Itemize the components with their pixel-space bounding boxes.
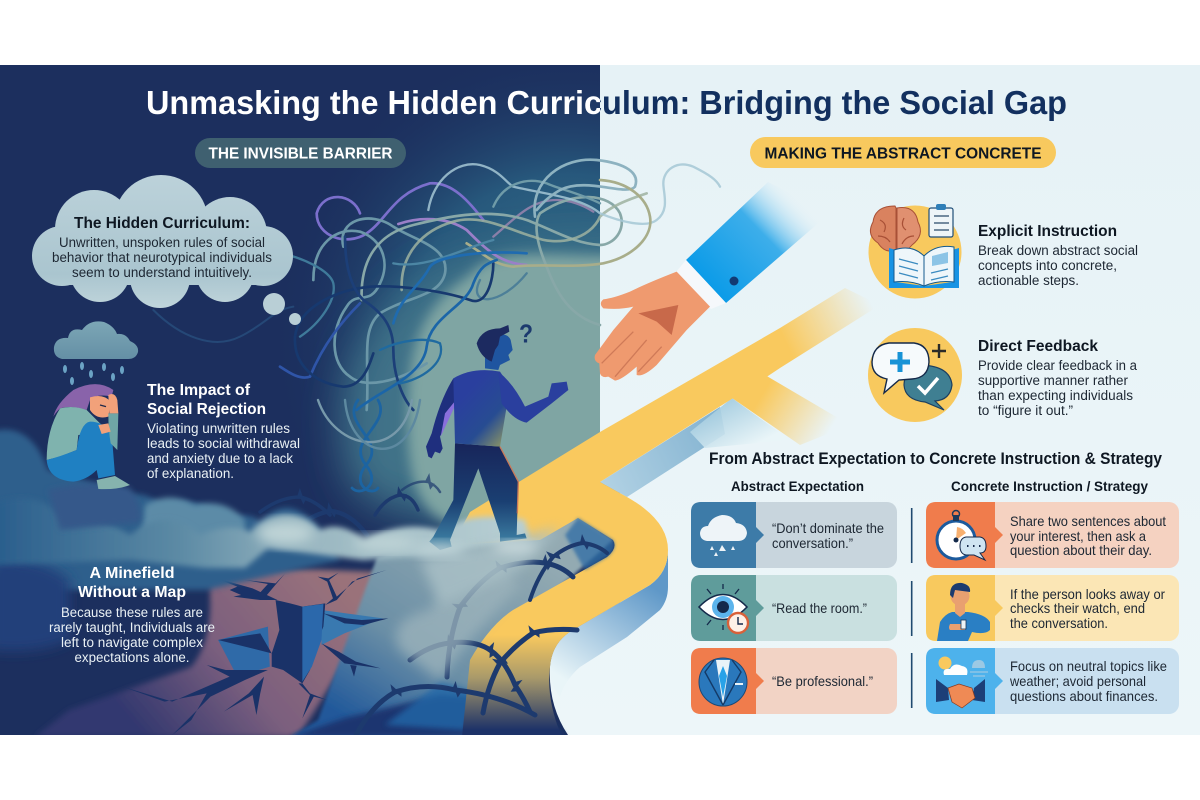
section: minefield without a map: rarely taught, Individuals are (49, 620, 215, 635)
icon: person checking watch (937, 583, 990, 641)
right arm (498, 372, 568, 423)
rock under seated figure (48, 483, 140, 530)
section: minefield without a map: left to navigate complex (61, 635, 203, 650)
question mark: ? (519, 319, 533, 349)
icon: weather and handshake (936, 656, 988, 708)
direct feedback text: Provide clear feedback in a (978, 358, 1137, 373)
card: read the room: “Read the room.” (772, 600, 867, 616)
icon: storm cloud (700, 515, 747, 556)
sleeve button (730, 276, 738, 286)
cloud heading: The Hidden Curriculum: (74, 215, 250, 232)
explicit instruction text: Break down abstract social (978, 243, 1138, 258)
card: neutral topics: questions about finances. (1010, 688, 1158, 704)
card: neutral topics: Focus on neutral topics like (1010, 658, 1167, 674)
icon: feedback speech bubbles (868, 328, 962, 422)
title: Unmasking the Hidden Curriculum: Bridging the Social Gap (146, 84, 1067, 121)
finger lines (602, 332, 662, 377)
blue wedge under branch (690, 398, 773, 448)
lower braid of strands (318, 400, 420, 491)
orange rim on legs (500, 447, 518, 513)
comparison table heading: From Abstract Expectation to Concrete Instruction & Strategy (709, 450, 1163, 468)
card: share two sentences: your interest, then ask a (1010, 528, 1146, 544)
column heading: abstract expectation: Abstract Expectation (731, 478, 864, 494)
card: looks away: the conversation. (1010, 615, 1108, 631)
left arm (426, 378, 454, 458)
legs (429, 443, 527, 550)
card: be professional (691, 648, 897, 714)
pill: making the abstract concrete (750, 137, 1056, 168)
section: impact of social rejection (147, 382, 300, 481)
blue sleeve (686, 183, 812, 303)
person walking through fog (426, 319, 568, 550)
section: minefield without a map: Because these rules are (61, 605, 203, 620)
torso (453, 370, 510, 447)
card: neutral topics: weather; avoid personal (1009, 673, 1146, 689)
card: share two sentences: question about their day. (1010, 542, 1152, 558)
explicit instruction text (978, 223, 1138, 288)
seated sad figure (47, 384, 130, 489)
section: minefield without a map: A Minefield (90, 565, 174, 582)
pill: making the abstract concrete: MAKING THE ABSTRACT CONCRETE (764, 146, 1042, 162)
section: minefield without a map (49, 565, 215, 665)
icon: rain cloud (54, 321, 138, 385)
column dividers (911, 508, 913, 708)
section: minefield without a map: Without a Map (78, 584, 186, 601)
column heading: concrete instruction: Concrete Instruction / Strategy (951, 478, 1148, 494)
thorny vines (260, 482, 607, 735)
card: neutral topics (926, 648, 1179, 714)
crack in the ground (122, 570, 388, 735)
direct feedback text: Direct Feedback (978, 338, 1098, 355)
section: impact of social rejection: Social Rejection (147, 401, 266, 418)
fog over feet (414, 542, 537, 557)
card: don't dominate: conversation.” (772, 535, 853, 551)
thought bubbles (263, 293, 301, 325)
card: share two sentences (926, 502, 1179, 568)
road outer side wall (550, 552, 668, 678)
section: minefield without a map: expectations alone. (74, 650, 190, 665)
section: impact of social rejection: of explanation. (147, 466, 234, 481)
explicit instruction text: concepts into concrete, (978, 258, 1117, 273)
neck and head (485, 335, 513, 370)
grey diagonal slab (290, 518, 613, 737)
direct feedback text: to “figure it out.” (978, 403, 1073, 418)
right light background (550, 65, 1200, 735)
cloud body text: Unwritten, unspoken rules of social (59, 235, 265, 250)
pill: the invisible barrier: THE INVISIBLE BARRIER (208, 146, 393, 162)
card: read the room (691, 575, 897, 641)
blue shadow strip under road (600, 407, 725, 497)
dark foreground floor (290, 695, 565, 737)
section: impact of social rejection: and anxiety due to a lack (147, 451, 293, 466)
yellow path to clarity (452, 288, 880, 737)
cloud body text: behavior that neurotypical individuals (52, 250, 272, 265)
cloud body text: seem to understand intuitively. (72, 265, 252, 280)
white cuff (676, 260, 726, 309)
card: don't dominate (691, 502, 897, 568)
helping hand (595, 272, 710, 381)
icon: business suit (699, 658, 747, 706)
pill: the invisible barrier (195, 138, 406, 168)
icon: brain, book and checklist (868, 204, 962, 298)
section: impact of social rejection: Violating unwritten rules (147, 421, 290, 436)
card: looks away (926, 575, 1179, 641)
explicit instruction text: actionable steps. (978, 273, 1079, 288)
direct feedback text: than expecting individuals (978, 388, 1133, 403)
card: looks away: If the person looks away or (1010, 586, 1165, 602)
card: share two sentences: Share two sentences about (1010, 513, 1166, 529)
palm crease (638, 305, 678, 335)
thought cloud: hidden curriculum (32, 175, 301, 325)
left dark background (0, 65, 620, 735)
tangled thoughts (153, 160, 720, 410)
icon: eye with clock (699, 584, 748, 633)
notch shading (565, 518, 615, 570)
icon: stopwatch with chat (937, 510, 986, 560)
teal glow behind person (316, 100, 600, 532)
direct feedback text (978, 338, 1137, 418)
explicit instruction text: Explicit Instruction (978, 223, 1117, 240)
card: don't dominate: “Don’t dominate the (772, 520, 884, 536)
card: looks away: checks their watch, end (1010, 600, 1145, 616)
fog bank (0, 430, 560, 680)
direct feedback text: supportive manner rather (978, 373, 1129, 388)
ground with mauve earth (40, 566, 374, 735)
section: impact of social rejection: leads to social withdrawal (147, 436, 300, 451)
card: be professional: “Be professional.” (772, 673, 873, 689)
cloud body text (52, 235, 272, 280)
section: impact of social rejection: The Impact of (147, 382, 251, 399)
